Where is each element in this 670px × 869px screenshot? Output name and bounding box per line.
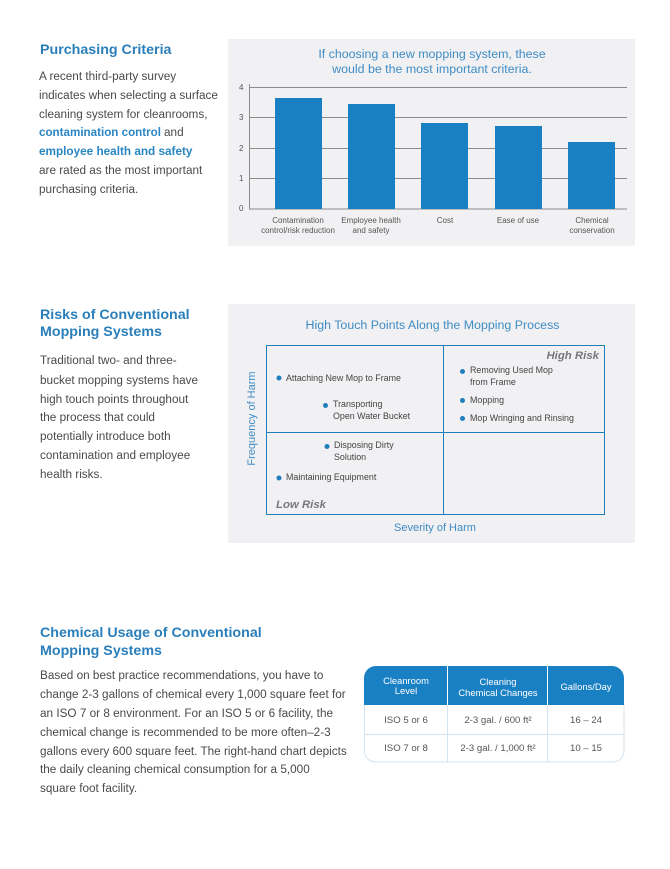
table: cleanroom chemical changes: Level: [395, 685, 417, 696]
chart title: [318, 47, 546, 76]
heading: Purchasing Criteria: Purchasing Criteria: [40, 42, 173, 58]
touch point: Attaching New Mop to Frame: Attaching New Mop to Frame: [286, 373, 401, 383]
bar chart: 1: [239, 174, 244, 183]
text block: purchasing criteria description: cleaning system for cleanrooms,: [39, 108, 208, 121]
text block: purchasing criteria description: indicates when selecting a surface: [39, 89, 218, 102]
bar chart: 2: [239, 144, 244, 153]
text block: risks description: the process that could: [40, 411, 155, 424]
table: cleanroom chemical changes: 16 – 24: [570, 715, 603, 726]
bar chart: 0: [239, 204, 244, 213]
touch point: Maintaining Equipment: Maintaining Equipment: [286, 472, 377, 482]
bar chart: Chemical: [575, 216, 609, 225]
touch point: Disposing Dirty Solution: Solution: [334, 452, 366, 462]
text block: risks description: potentially introduce both: [40, 430, 171, 443]
touch point: Removing Used Mop from Frame: Removing Used Mop: [470, 365, 553, 375]
text block: chemical usage description: [40, 669, 347, 795]
text block: purchasing criteria description: are rated as the most important: [39, 164, 203, 177]
table: cleanroom chemical changes: Cleaning: [479, 676, 517, 687]
text block: chemical usage description: an ISO 7 or 8 environment. For an ISO 5 or 6 facility, the: [40, 707, 333, 720]
table body: [364, 705, 624, 762]
bar chart: [239, 83, 627, 235]
text block: risks description: Traditional two- and three-: [40, 354, 177, 367]
text block: purchasing criteria description: [39, 70, 218, 196]
panel: purchasing criteria bar chart: [228, 39, 635, 246]
text block: purchasing criteria description: contamination control: [39, 126, 161, 139]
heading: Risks of Conventional Mopping Systems: [40, 307, 190, 340]
table: cleanroom chemical changes: Gallons/Day: [560, 681, 612, 692]
bar chart: Cost: [437, 216, 454, 225]
text block: purchasing criteria description: employee health and safety: [39, 145, 193, 158]
text block: chemical usage description: Based on best practice recommendations, you have to: [40, 669, 324, 682]
bar chart: 4: [239, 83, 244, 92]
text block: chemical usage description: the daily cleaning chemical consumption for a 5,000: [40, 763, 310, 776]
bar chart: Contamination: [272, 216, 324, 225]
text block: risks description: contamination and employee: [40, 449, 191, 462]
text block: purchasing criteria description: and: [164, 126, 184, 139]
text block: risks description: high touch points throughout: [40, 393, 189, 406]
touch point: Mopping: Mopping: [470, 395, 504, 405]
text block: purchasing criteria description: A recent third-party survey: [39, 70, 176, 83]
matrix title: High Touch Points Along the Mopping Process: [306, 318, 559, 332]
y axis label: Frequency of Harm: [246, 371, 258, 466]
panel: risk matrix: [228, 304, 635, 543]
bar chart: conservation: [569, 226, 615, 235]
touch point: Transporting Open Water Bucket: Transporting: [333, 399, 383, 409]
label: Low Risk: Low Risk: [276, 499, 327, 511]
text block: chemical usage description: square foot facility.: [40, 782, 137, 795]
matrix grid: [266, 345, 605, 514]
table: cleanroom chemical changes: Chemical Changes: [458, 687, 538, 698]
bar chart: 3: [239, 113, 244, 122]
touch point: Removing Used Mop from Frame: from Frame: [470, 377, 516, 387]
table header: [364, 666, 624, 705]
text block: chemical usage description: chemical change is recommended to be more often–2-3: [40, 726, 331, 739]
chart title: would be the most important criteria.: [331, 62, 532, 76]
bar chart: and safety: [353, 226, 389, 235]
heading: Chemical Usage of Conventional Mopping Systems: [40, 625, 262, 659]
touch point: Removing Used Mop from Frame: [460, 365, 553, 387]
heading: Chemical Usage of Conventional Mopping Systems: Mopping Systems: [40, 643, 162, 659]
bar chart: Employee health: [341, 216, 401, 225]
heading: Chemical Usage of Conventional Mopping Systems: Chemical Usage of Conventional: [40, 625, 262, 641]
text block: risks description: health risks.: [40, 468, 103, 481]
table: cleanroom chemical changes: ISO 5 or 6: [384, 715, 428, 726]
table: cleanroom chemical changes: 2-3 gal. / 600 ft²: [464, 715, 532, 726]
touch point: Disposing Dirty Solution: [324, 440, 394, 462]
text block: chemical usage description: change 2-3 gallons of chemical every 1,000 square feet for: [40, 688, 346, 701]
touch point: Transporting Open Water Bucket: Open Water Bucket: [333, 411, 411, 421]
text block: risks description: [40, 354, 199, 481]
table: cleanroom chemical changes: 10 – 15: [570, 743, 602, 754]
x axis label: Severity of Harm: [394, 522, 476, 534]
heading: Risks of Conventional Mopping Systems: Mopping Systems: [40, 324, 162, 340]
touch point: Mop Wringing and Rinsing: Mop Wringing and Rinsing: [470, 413, 574, 423]
text block: chemical usage description: gallons every 600 square feet. The right-hand chart depicts: [40, 745, 347, 758]
table: cleanroom chemical changes: ISO 7 or 8: [384, 743, 428, 754]
label: High Risk: High Risk: [546, 350, 600, 362]
table: cleanroom chemical changes: 2-3 gal. / 1,000 ft²: [460, 743, 536, 754]
heading: Risks of Conventional Mopping Systems: Risks of Conventional: [40, 307, 190, 323]
bar chart: control/risk reduction: [261, 226, 335, 235]
touch point: Transporting Open Water Bucket: [323, 399, 411, 421]
table: cleanroom chemical changes: Cleanroom: [383, 675, 429, 686]
chart title: If choosing a new mopping system, these: [318, 47, 546, 61]
text block: risks description: bucket mopping systems have: [40, 374, 199, 387]
bar chart: Ease of use: [497, 216, 540, 225]
text block: purchasing criteria description: purchasing criteria.: [39, 183, 138, 196]
table: cleanroom chemical changes: [364, 666, 624, 762]
touch point: Disposing Dirty Solution: Disposing Dirty: [334, 440, 394, 450]
